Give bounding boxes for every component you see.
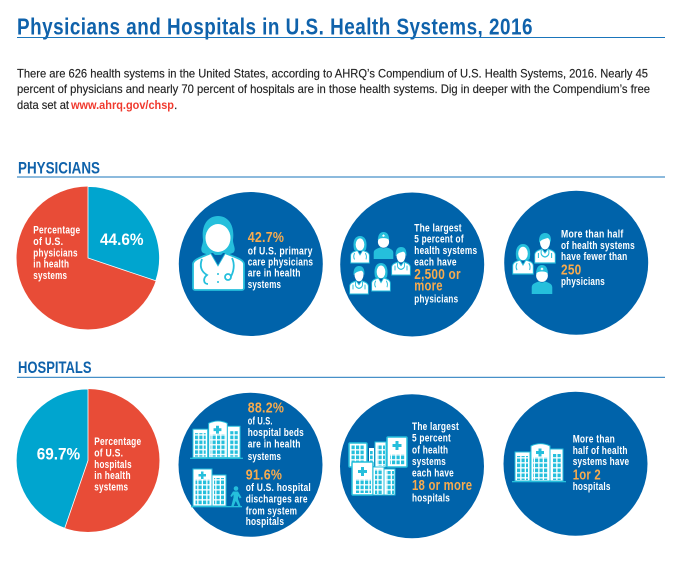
- stat text: have fewer than: [561, 251, 628, 263]
- pie chart: hospitals: of U.S.: [94, 448, 123, 460]
- stat text: The largest: [414, 223, 462, 235]
- stat text: discharges: from system: [246, 505, 297, 517]
- stat text: [561, 228, 635, 288]
- stat text: health systems: [414, 245, 477, 257]
- stat text: beds: hospital beds: [248, 427, 304, 439]
- pie chart: physicians: of U.S.: [33, 236, 63, 248]
- panel: largest physician systems: [340, 192, 484, 336]
- stat text: discharges: discharges are: [246, 493, 308, 505]
- stat text: [248, 230, 313, 291]
- panel: primary care physicians: [179, 192, 323, 336]
- stat text: are in health: [248, 268, 301, 280]
- stat text: hospitals: [573, 481, 611, 493]
- stat text: [412, 421, 472, 505]
- icon: hospital buildings: [512, 444, 566, 482]
- icon: group of five physicians: [350, 232, 410, 294]
- intro text: percent of physicians and nearly 70 percent of hospitals are in those health systems. Dig in deeper with the Compendium’s free: [17, 82, 650, 96]
- stat text: more: [414, 279, 443, 295]
- stat text: each have: [412, 468, 454, 480]
- stat text: of U.S. primary: [248, 245, 313, 257]
- pie chart: hospitals: hospitals: [94, 459, 132, 471]
- pie chart: physicians: in health: [33, 258, 69, 270]
- pie chart: physicians: Percentage: [33, 224, 80, 236]
- icon: female doctor: [193, 216, 244, 290]
- stat text: beds: 88.2%: [248, 401, 284, 417]
- stat text: discharges: of U.S. hospital: [246, 482, 311, 494]
- stat text: More than: [573, 433, 615, 445]
- stat text: [414, 223, 477, 306]
- intro text: .: [174, 98, 177, 112]
- heading: physicians: PHYSICIANS: [18, 158, 100, 178]
- stat text: discharges: hospitals: [246, 516, 284, 528]
- stat text: systems: [412, 456, 446, 468]
- intro text: [17, 66, 650, 112]
- pie chart: physicians: [16, 186, 160, 330]
- stat text: each have: [414, 257, 457, 269]
- stat text: [573, 433, 629, 493]
- intro text: www.ahrq.gov/chsp: [70, 98, 174, 112]
- stat text: 2,500 or: [414, 267, 461, 283]
- pie chart: hospitals: Percentage: [94, 436, 141, 448]
- stat text: systems have: [573, 456, 629, 468]
- stat text: 18 or more: [412, 478, 472, 494]
- stat text: discharges: [246, 467, 311, 528]
- pie chart: physicians: physicians: [33, 247, 78, 259]
- stat text: beds: [248, 401, 304, 463]
- stat text: hospitals: [412, 493, 450, 505]
- icon: hospital with walking patient: [191, 469, 242, 507]
- pie chart: physicians: 44.6%: [100, 230, 144, 249]
- panel: largest hospital systems: [340, 394, 484, 538]
- icon: hospital cluster: [349, 437, 407, 495]
- stat text: of health: [412, 444, 448, 456]
- stat text: 42.7%: [248, 230, 284, 246]
- stat text: discharges: 91.6%: [246, 467, 282, 483]
- stat text: beds: systems: [248, 451, 281, 463]
- pie chart: hospitals: in health: [94, 470, 131, 482]
- stat text: The largest: [412, 421, 459, 433]
- pie chart: physicians: systems: [33, 270, 67, 282]
- stat text: beds: are in health: [248, 438, 301, 450]
- stat text: beds: of U.S.: [248, 415, 273, 427]
- icon: hospital buildings: [190, 421, 243, 459]
- stat text: 5 percent of: [414, 234, 464, 246]
- stat text: physicians: [414, 294, 458, 306]
- heading: hospitals: HOSPITALS: [18, 358, 92, 377]
- intro text: There are 626 health systems in the United States, according to AHRQ’s Compendium of U.S. Health Systems, 2016. Nearly 45: [17, 66, 648, 80]
- stat text: 1or 2: [573, 467, 601, 483]
- stat text: physicians: [561, 276, 605, 288]
- stat text: of health systems: [561, 240, 635, 252]
- stat text: More than half: [561, 228, 624, 240]
- panel: hospital beds and discharges: [178, 393, 322, 537]
- panel: smaller physician systems: [504, 191, 648, 335]
- title: Physicians and Hospitals in U.S. Health Systems, 2016: [17, 14, 533, 40]
- pie chart: hospitals: [16, 389, 160, 532]
- stat text: 250: [561, 262, 582, 278]
- stat text: half of health: [573, 445, 628, 457]
- stat text: care physicians: [248, 256, 313, 268]
- stat text: 5 percent: [412, 433, 451, 445]
- panel: smaller hospital systems: [504, 392, 648, 536]
- stat text: systems: [248, 279, 281, 291]
- icon: group of three physicians: [513, 233, 555, 294]
- intro text: data set at: [17, 98, 70, 112]
- pie chart: hospitals: 69.7%: [37, 444, 80, 464]
- pie chart: hospitals: systems: [94, 481, 128, 493]
